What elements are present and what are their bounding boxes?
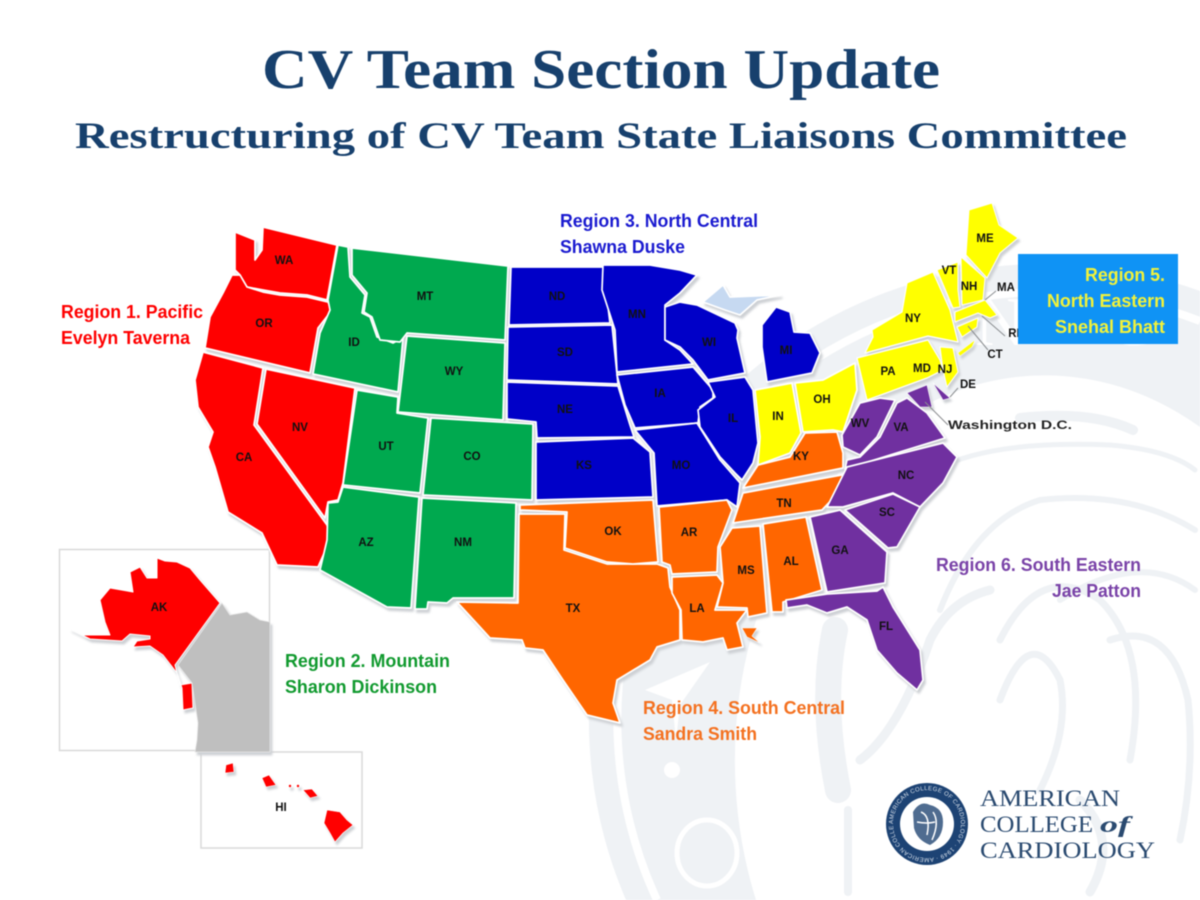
state code labels: OR xyxy=(255,318,273,330)
state code labels: AK xyxy=(151,602,168,614)
label: region 6 South Eastern: Jae Patton xyxy=(1052,581,1141,601)
state NC xyxy=(827,443,957,507)
state AZ xyxy=(320,487,419,608)
state MI xyxy=(762,307,820,382)
state code labels: OK xyxy=(604,526,622,538)
label: region 2 Mountain: Region 2. Mountain xyxy=(285,651,450,671)
state NJ xyxy=(940,347,958,387)
state code labels: NM xyxy=(454,537,472,549)
state code labels: SC xyxy=(879,507,895,519)
state code labels: KY xyxy=(793,451,809,463)
state MD purple xyxy=(907,385,932,407)
state GA xyxy=(810,510,887,592)
state SD xyxy=(507,325,618,384)
panel: region 5 North Eastern states xyxy=(755,203,1018,465)
state code labels: WI xyxy=(702,337,716,349)
state NV xyxy=(257,369,355,518)
state code labels: NE xyxy=(557,404,573,416)
panel: region 2 Mountain states xyxy=(313,245,533,609)
state KY xyxy=(743,432,843,488)
label box: region 5 North Eastern xyxy=(1018,254,1178,344)
state code labels: MS xyxy=(737,565,755,577)
panel: region 6 South Eastern states xyxy=(786,383,957,690)
state code labels: HI xyxy=(275,802,287,814)
state code labels: NC xyxy=(898,470,914,482)
label: region 4 South Central: Sandra Smith xyxy=(643,724,757,744)
state code labels: FL xyxy=(879,621,893,633)
state code labels: NJ xyxy=(938,364,952,376)
state MO xyxy=(635,423,740,507)
state code labels: ND xyxy=(549,291,565,303)
state code labels: CT xyxy=(987,349,1003,361)
state code labels: MA xyxy=(997,282,1015,294)
title: CV Team Section Update xyxy=(262,39,940,101)
state WY xyxy=(398,336,505,420)
state TN xyxy=(733,472,858,523)
state code labels: MT xyxy=(417,291,433,303)
state IN xyxy=(755,383,801,465)
panel: region 3 North Central states xyxy=(507,265,820,507)
state code labels: AL xyxy=(783,556,799,568)
wordmark xyxy=(980,786,1155,863)
state OR xyxy=(205,275,332,373)
state code labels: CO xyxy=(463,451,481,463)
state code labels: DE xyxy=(960,379,976,391)
state code labels: VT xyxy=(942,265,956,277)
state TX xyxy=(457,514,680,723)
state code labels: WA xyxy=(275,255,293,267)
label: region 3 North Central xyxy=(560,211,758,257)
wordmark: COLLEGE xyxy=(980,812,1093,837)
state code labels: NY xyxy=(905,313,921,325)
label: Washington D.C.: Washington D.C. xyxy=(948,418,1072,432)
label: region 1 Pacific: Region 1. Pacific xyxy=(61,302,203,322)
state FL xyxy=(786,587,923,690)
state code labels: MO xyxy=(672,460,690,472)
state code labels: UT xyxy=(378,441,394,453)
label: region 2 Mountain xyxy=(285,651,450,697)
inset frame: Hawaii xyxy=(201,752,362,848)
leader lines for small states xyxy=(925,291,1005,425)
state OH xyxy=(795,363,857,432)
state code labels: IL xyxy=(728,413,738,425)
label box: region 5 North Eastern: Snehal Bhatt xyxy=(1055,317,1165,337)
state CA xyxy=(195,352,330,567)
state CT xyxy=(957,318,978,337)
state code labels: OH xyxy=(813,394,831,406)
state code labels: AR xyxy=(681,527,698,539)
state LA island xyxy=(742,628,760,643)
state code labels: LA xyxy=(689,603,705,615)
state code labels: GA xyxy=(831,545,849,557)
state code labels: IA xyxy=(654,388,666,400)
state UT xyxy=(343,390,428,493)
seal xyxy=(885,782,969,866)
state AK xyxy=(70,558,220,710)
state OK xyxy=(520,500,658,564)
state NY xyxy=(865,272,958,353)
state CO xyxy=(423,418,533,500)
state WI xyxy=(665,302,745,380)
state code labels: SD xyxy=(557,347,573,359)
state code labels: NH xyxy=(961,281,977,293)
inset frame: Alaska xyxy=(60,550,270,750)
state NH xyxy=(961,257,985,305)
wordmark: AMERICAN xyxy=(980,786,1120,811)
state code labels: ID xyxy=(348,337,360,349)
label: region 3 North Central: Shawna Duske xyxy=(560,237,685,257)
state code labels: MD xyxy=(913,363,931,375)
seal: AMERICAN COLLEGE OF CARDIOLOGY · 1949 · AMERICAN COLLEGE xyxy=(888,785,966,863)
state AL xyxy=(763,517,822,612)
state LA xyxy=(672,575,747,650)
subtitle: Restructuring of CV Team State Liaisons Committee xyxy=(75,116,1127,157)
state NE xyxy=(507,382,634,438)
state PA and MD xyxy=(857,340,943,400)
state NM xyxy=(415,498,516,609)
state code labels: MI xyxy=(780,345,792,357)
state MN xyxy=(602,265,697,372)
state Long Island xyxy=(958,340,975,356)
state code labels: IN xyxy=(772,411,784,423)
state MA xyxy=(955,300,997,322)
state code labels: VA xyxy=(893,422,909,434)
state code labels: AZ xyxy=(358,537,374,549)
state code labels: CA xyxy=(236,452,252,464)
state code labels: RI xyxy=(1008,328,1020,340)
label: region 4 South Central xyxy=(643,698,845,744)
state AR xyxy=(659,500,732,574)
state ID xyxy=(313,245,403,392)
label: region 1 Pacific xyxy=(61,302,203,348)
label box: region 5 North Eastern: Region 5. xyxy=(1085,265,1165,285)
state code labels: KS xyxy=(576,460,592,472)
state HI xyxy=(225,763,353,842)
state code labels: WV xyxy=(851,418,870,430)
background watermark seal: C xyxy=(1107,284,1153,361)
state IL xyxy=(698,377,758,480)
state VT xyxy=(937,262,960,308)
state code labels: TN xyxy=(776,498,792,510)
panel: region 1 Pacific states xyxy=(70,227,355,842)
wordmark: CARDIOLOGY xyxy=(980,838,1155,863)
state DE purple xyxy=(933,383,950,400)
state MS xyxy=(717,526,767,617)
state ND xyxy=(509,267,610,325)
state code labels: MN xyxy=(628,309,646,321)
state VA xyxy=(845,398,945,469)
state SC xyxy=(845,494,920,548)
label: region 6 South Eastern: Region 6. South Eastern xyxy=(936,555,1141,575)
state code labels: TX xyxy=(566,603,581,615)
label: region 1 Pacific: Evelyn Taverna xyxy=(61,328,191,348)
map: Canada portion xyxy=(178,603,270,752)
state code labels: WY xyxy=(445,366,464,378)
label: region 6 South Eastern xyxy=(936,555,1141,601)
background watermark seal xyxy=(589,264,1200,900)
state WA xyxy=(235,227,337,300)
state code labels xyxy=(151,233,1020,814)
state KS xyxy=(536,438,653,500)
state MT xyxy=(352,248,508,342)
panel: region 4 South Central states xyxy=(457,432,858,723)
state code labels: NV xyxy=(292,422,308,434)
state code labels: PA xyxy=(880,366,896,378)
wordmark: of xyxy=(1100,812,1134,837)
label: region 2 Mountain: Sharon Dickinson xyxy=(285,677,437,697)
label: region 4 South Central: Region 4. South Central xyxy=(643,698,845,718)
label box: region 5 North Eastern: North Eastern xyxy=(1047,291,1165,311)
map of the United States xyxy=(70,203,1018,842)
state IA xyxy=(617,367,713,428)
label: region 3 North Central: Region 3. North Central xyxy=(560,211,758,231)
state WV xyxy=(842,398,895,455)
state ME xyxy=(966,203,1018,278)
lake xyxy=(703,285,780,315)
state code labels: ME xyxy=(976,233,994,245)
background watermark seal: N xyxy=(975,284,1025,361)
